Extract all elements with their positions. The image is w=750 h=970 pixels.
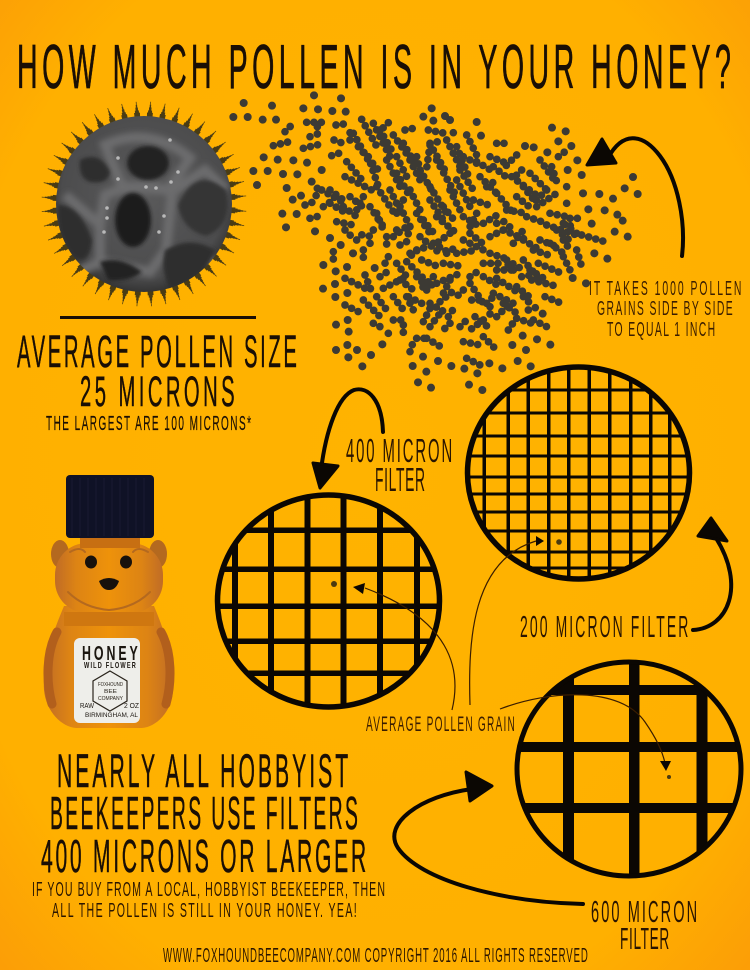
text: hobbyist beekeepers headline: BEEKEEPERS USE FILTERS bbox=[50, 789, 358, 839]
icon: honey bear bottle bbox=[44, 475, 173, 728]
bottle label: 2 OZ bbox=[124, 701, 139, 710]
text: hobbyist beekeepers headline bbox=[41, 744, 366, 882]
divider under pollen grain bbox=[60, 316, 256, 319]
text: average pollen size: 25 MICRONS bbox=[80, 369, 235, 416]
label: 400 micron filter: FILTER bbox=[375, 462, 425, 499]
label: 600 micron filter bbox=[591, 895, 697, 957]
label: 400 micron filter bbox=[346, 434, 452, 499]
arrow: 200 micron filter bbox=[693, 518, 731, 630]
bottle label: WILD FLOWER bbox=[84, 662, 136, 670]
bottle body bbox=[44, 538, 173, 728]
text: 1000 pollen grains note: TO EQUAL 1 INCH bbox=[607, 320, 715, 341]
filter: 600 micron bbox=[510, 655, 750, 885]
title: HOW MUCH POLLEN IS IN YOUR HONEY? bbox=[17, 33, 731, 102]
bottle label: COMPANY bbox=[98, 696, 123, 702]
bottle label: HONEY bbox=[82, 642, 138, 665]
bottle label: FOXHOUND bbox=[98, 682, 123, 688]
pollen grain scatter bbox=[233, 95, 638, 390]
label: 600 micron filter: 600 MICRON bbox=[591, 895, 697, 930]
text: 1000 pollen grains note bbox=[589, 279, 741, 341]
filter: 200 micron bbox=[460, 360, 700, 590]
text: local beekeeper note: ALL THE POLLEN IS STILL IN YOUR HONEY. YEA! bbox=[52, 901, 357, 922]
text: local beekeeper note bbox=[32, 880, 385, 922]
arrow: 400 micron filter bbox=[313, 389, 383, 488]
callout: average pollen grain with arrows: AVERAGE POLLEN GRAIN bbox=[366, 713, 515, 736]
callout: average pollen grain with arrows bbox=[353, 536, 671, 771]
bottle label: BIRMINGHAM, AL bbox=[85, 712, 138, 719]
icon: pollen grain micrograph bbox=[43, 103, 245, 305]
text: 1000 pollen grains note: GRAINS SIDE BY SIDE bbox=[597, 299, 733, 320]
text: average pollen size bbox=[17, 327, 297, 435]
text: local beekeeper note: IF YOU BUY FROM A LOCAL, HOBBYIST BEEKEEPER, THEN bbox=[32, 880, 385, 901]
bottle cap bbox=[66, 475, 154, 538]
arrow: to pollen scatter bbox=[587, 138, 683, 256]
bottle label: BEE bbox=[104, 689, 117, 695]
label: 400 micron filter: 400 MICRON bbox=[346, 434, 452, 470]
text: 1000 pollen grains note: IT TAKES 1000 POLLEN bbox=[589, 279, 741, 300]
arrow: 600 micron filter bbox=[394, 772, 583, 904]
label: 200 micron filter: 200 MICRON FILTER bbox=[520, 610, 688, 645]
text: average pollen size: AVERAGE POLLEN SIZE bbox=[17, 327, 297, 377]
text: average pollen size: THE LARGEST ARE 100 MICRONS* bbox=[46, 414, 251, 435]
text: hobbyist beekeepers headline: NEARLY ALL HOBBYIST bbox=[57, 744, 348, 797]
text: hobbyist beekeepers headline: 400 MICRONS OR LARGER bbox=[41, 831, 366, 882]
label: 600 micron filter: FILTER bbox=[620, 922, 669, 957]
bottle label: RAW bbox=[80, 701, 95, 710]
bottle label bbox=[74, 638, 140, 723]
filter: 400 micron bbox=[210, 485, 450, 715]
footer: copyright: WWW.FOXHOUNDBEECOMPANY.COM COPYRIGHT 2016 ALL RIGHTS RESERVED bbox=[163, 945, 588, 967]
